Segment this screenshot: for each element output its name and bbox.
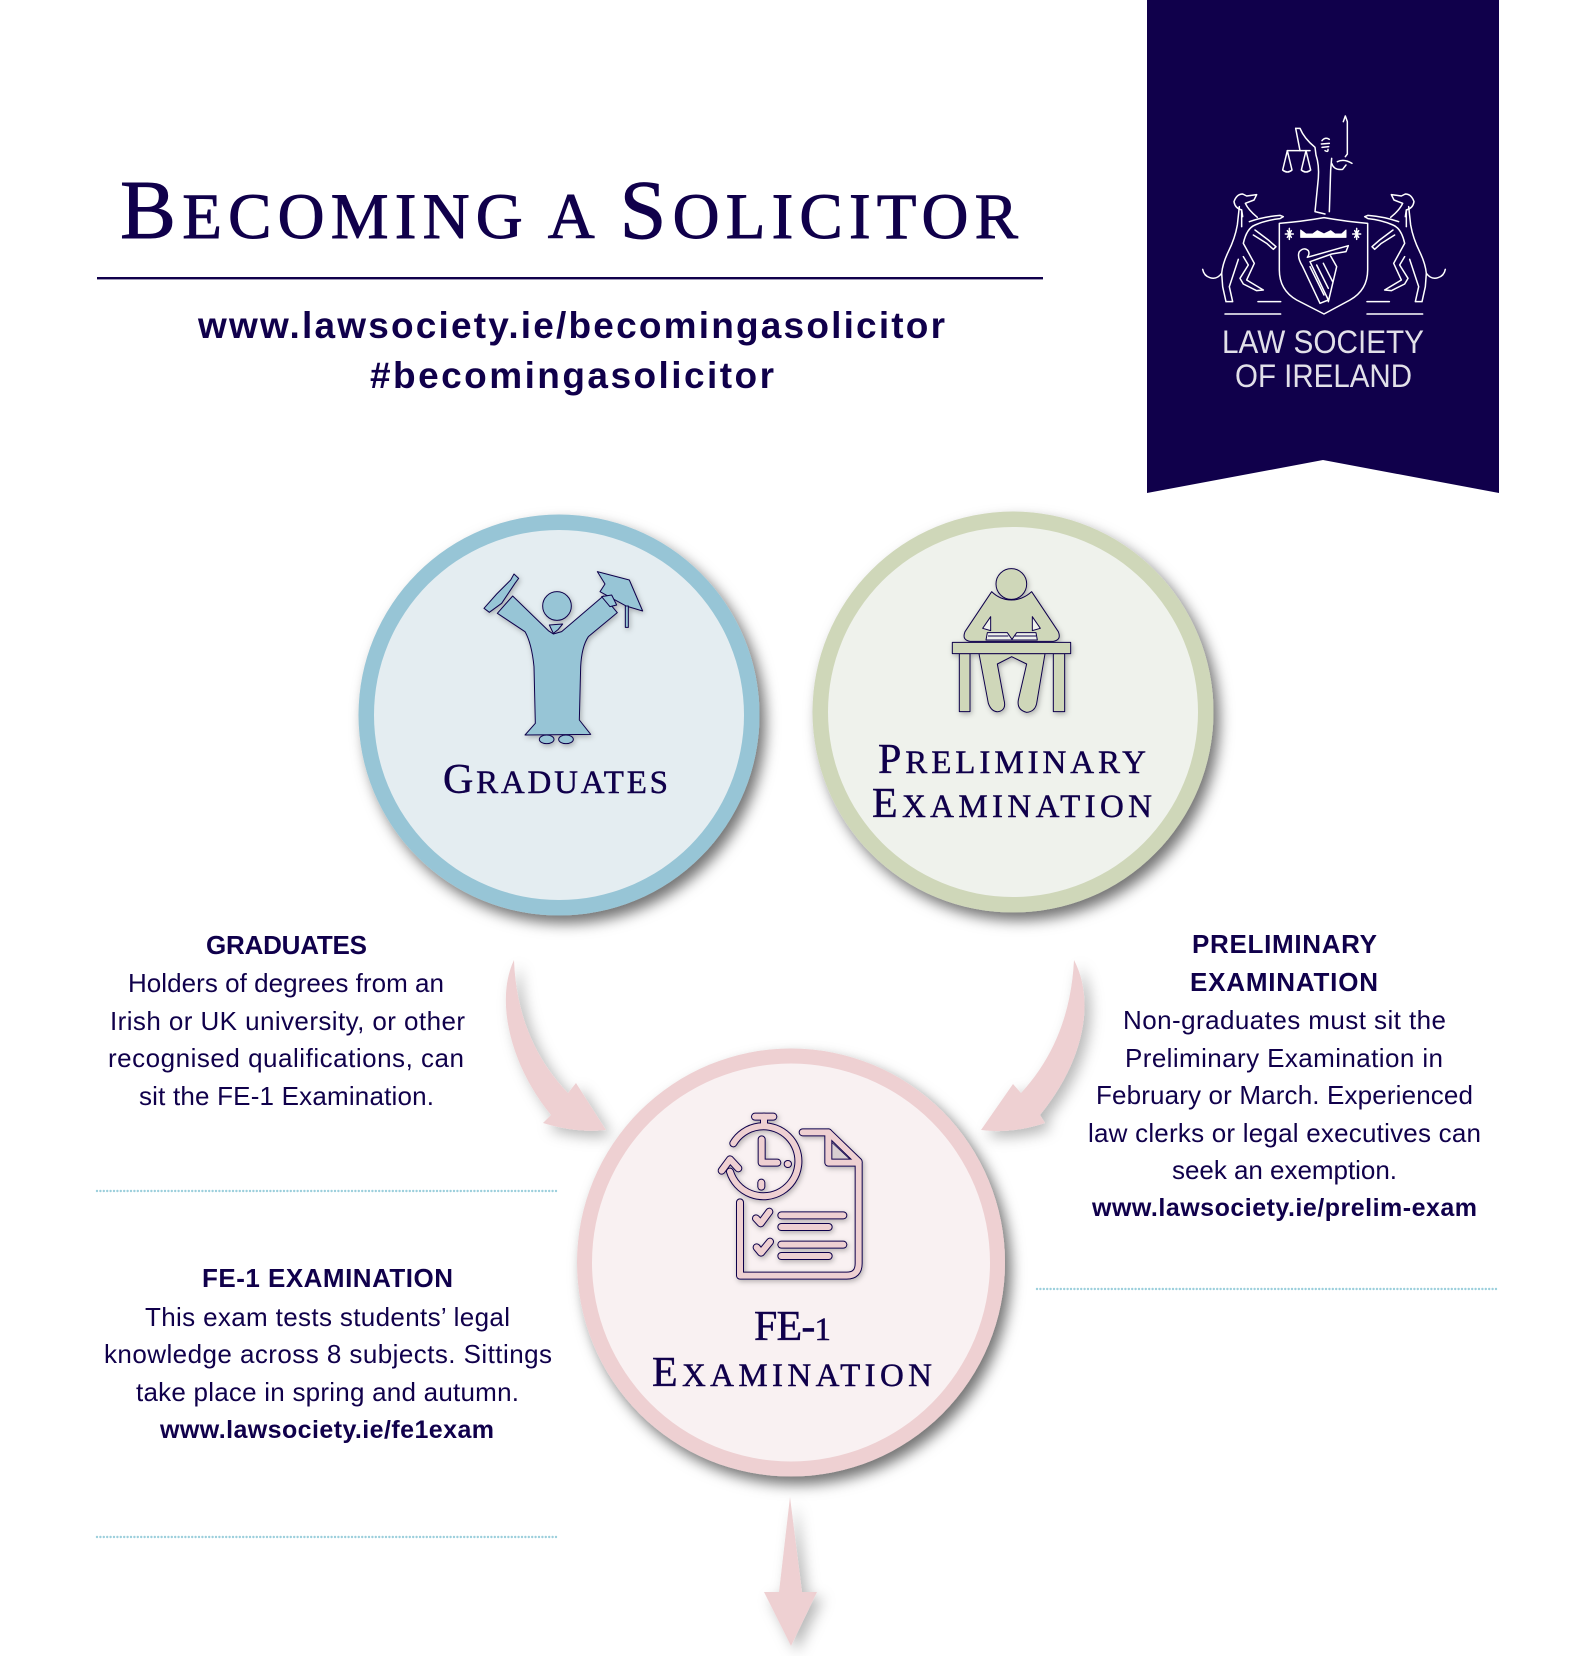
banner: Law Society of Ireland logo [1147, 0, 1499, 493]
circle label: FE-1 examination [652, 1304, 932, 1396]
text block: FE-1 examination: take place in spring and autumn. [136, 1377, 519, 1407]
text block: FE-1 examination: This exam tests students’ legal [145, 1302, 510, 1332]
text block: preliminary examination: law clerks or legal executives can [1088, 1118, 1481, 1148]
logo: coat of arms [1203, 116, 1445, 314]
panel: preliminary examination circle [812, 512, 1214, 912]
arrow: FE-1 downwards [764, 1497, 817, 1646]
website and hashtag: www.lawsociety.ie/becomingasolicitor [197, 305, 945, 346]
circle label: FE-1 examination: EXAMINATION [652, 1350, 932, 1396]
text block: preliminary examination: PRELIMINARY [1192, 929, 1377, 959]
text block: graduates: recognised qualifications, can [108, 1043, 464, 1073]
text block: preliminary examination: seek an exemption. [1172, 1155, 1397, 1185]
text block: graduates: Irish or UK university, or other [110, 1006, 465, 1036]
panel: graduates circle [358, 514, 760, 916]
website and hashtag: #becomingasolicitor [370, 355, 774, 396]
text block: preliminary examination: Non-graduates must sit the [1123, 1005, 1446, 1035]
arrow: preliminary examination to FE-1 [981, 960, 1085, 1131]
arrow: graduates to FE-1 [506, 960, 606, 1131]
text block: preliminary examination: EXAMINATION [1190, 967, 1378, 997]
text block: preliminary examination: Preliminary Examination in [1125, 1043, 1443, 1073]
panel: FE-1 examination circle [577, 1048, 1005, 1476]
text block: graduates: sit the FE-1 Examination. [139, 1081, 434, 1111]
text block: preliminary examination [1088, 929, 1481, 1222]
text block: preliminary examination: February or March. Experienced [1096, 1080, 1473, 1110]
logo text: OF IRELAND [1235, 358, 1412, 394]
text block: FE-1 examination [104, 1263, 552, 1444]
icon: student reading at desk [952, 569, 1071, 712]
icon: stopwatch and checklist document [722, 1117, 859, 1276]
logo text [1222, 324, 1424, 394]
text block: preliminary examination: www.lawsociety.ie/prelim-exam [1091, 1194, 1477, 1222]
circle label: FE-1 examination: FE-1 [754, 1304, 831, 1350]
icon: graduate with scroll and cap [484, 572, 643, 744]
text block: FE-1 examination: www.lawsociety.ie/fe1exam [159, 1416, 494, 1444]
logo text: LAW SOCIETY [1222, 324, 1424, 360]
circle label: preliminary examination [872, 737, 1152, 827]
circle label: preliminary examination: EXAMINATION [872, 781, 1152, 827]
text block: FE-1 examination: knowledge across 8 subjects. Sittings [104, 1339, 552, 1369]
text block: FE-1 examination: FE-1 EXAMINATION [202, 1263, 453, 1293]
text block: graduates: Holders of degrees from an [128, 968, 444, 998]
text block: graduates [108, 930, 465, 1111]
website and hashtag [197, 305, 945, 396]
circle label: graduates: GRADUATES [443, 757, 668, 803]
title: BECOMING A SOLICITOR [120, 164, 1019, 257]
text block: graduates: GRADUATES [206, 930, 367, 960]
circle label: preliminary examination: PRELIMINARY [878, 737, 1146, 783]
